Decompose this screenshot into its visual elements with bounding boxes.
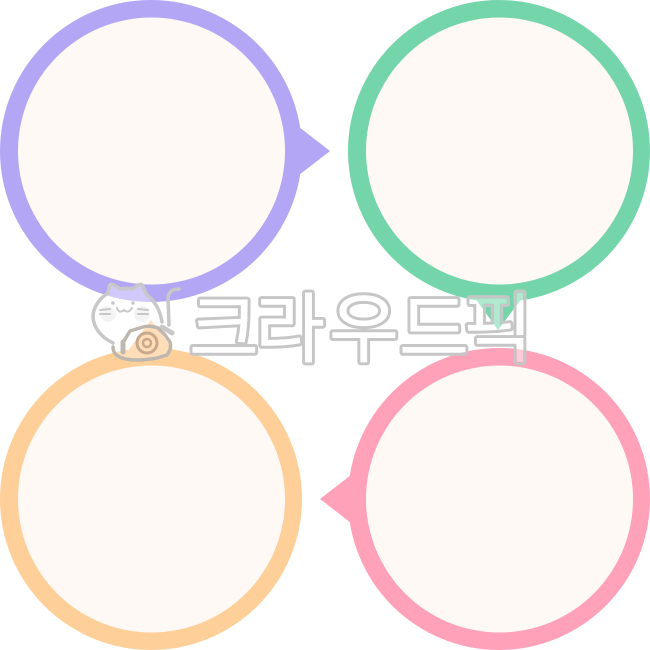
speech bubble: pink, bottom right <box>320 348 650 650</box>
speech bubble: green, top right <box>348 0 650 330</box>
watermark: wordmark: 드 <box>399 288 469 373</box>
watermark: wordmark: 크 <box>189 288 259 373</box>
watermark: cat and camera logo <box>93 284 179 360</box>
watermark: wordmark: 우 <box>329 288 399 373</box>
watermark: wordmark: 우 <box>329 288 399 373</box>
watermark: wordmark: 라 <box>255 288 325 373</box>
watermark: wordmark: 드 <box>399 288 469 373</box>
watermark: wordmark: 크 <box>189 288 259 373</box>
watermark: wordmark: 픽 <box>463 288 533 373</box>
watermark: wordmark: 라 <box>255 288 325 373</box>
speech bubble: orange, bottom left <box>0 320 302 650</box>
speech bubble: purple, top left <box>0 0 330 302</box>
watermark: wordmark: 픽 <box>463 288 533 373</box>
watermark: wordmark <box>190 290 526 366</box>
